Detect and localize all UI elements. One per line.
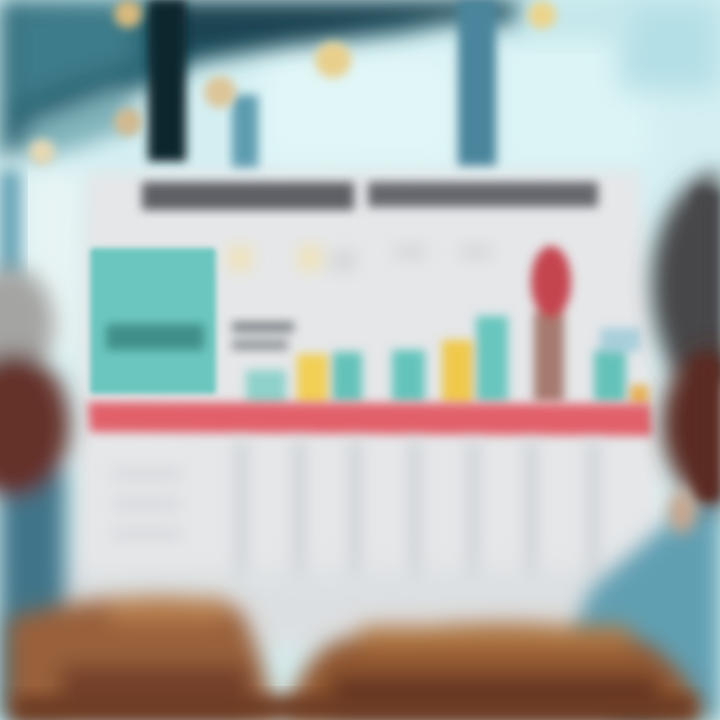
roof canopy [0,0,530,160]
person silhouette in red [531,246,571,402]
panel: teal summary box [90,248,216,394]
seat: left [8,596,276,720]
poster sheet [72,170,668,590]
red header band [88,402,652,436]
hanging lights [29,0,556,165]
bar chart [246,316,648,405]
panel: chart poster [72,170,668,590]
data table [112,440,598,585]
chart header marks [228,245,492,272]
text block: summary value [106,324,204,350]
person: left viewer [0,267,70,720]
heading: illegible title [142,182,598,210]
roof support posts [148,0,496,170]
seat base: soft join along the bottom edge [14,696,694,720]
lower poster edge [20,570,660,650]
seat: right [285,623,706,720]
foreground: brown seats [8,596,706,720]
text block: small chart label [232,322,294,350]
person: right viewer [570,170,720,720]
